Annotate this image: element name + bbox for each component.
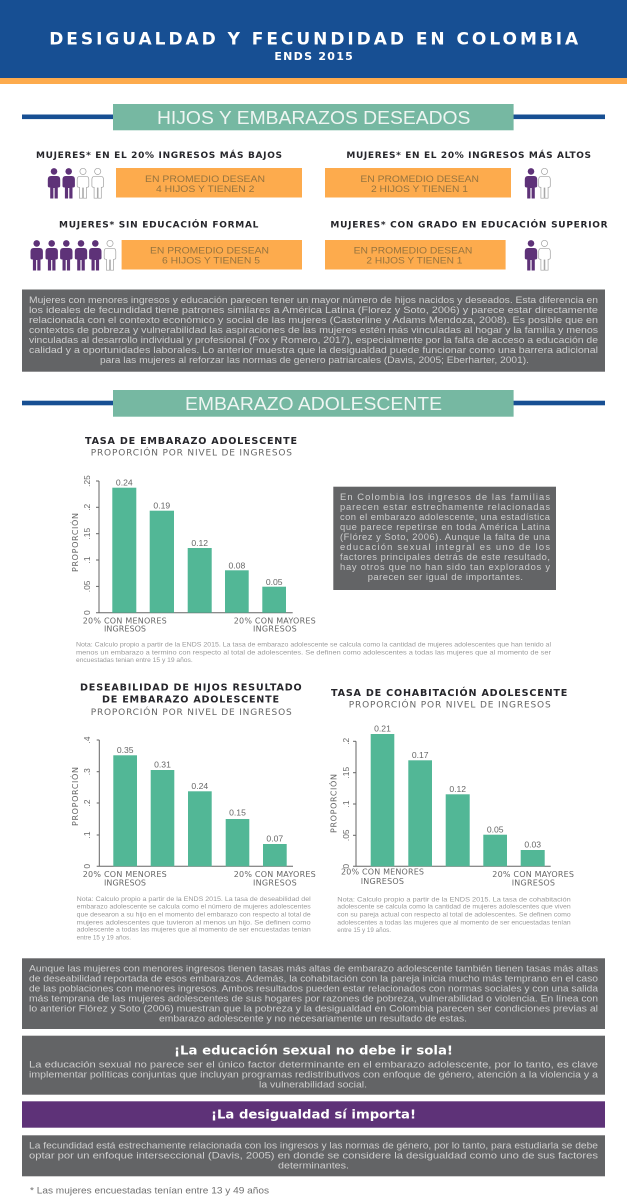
callout: 2 hijos y tienen 1 (325, 240, 506, 270)
text block: ingresos y educación: para las mujeres al reforzar las normas de genero patriarcales (Davis, 2005; Eberharter, 2001). (100, 354, 529, 365)
bar chart: tasa de embarazo adolescente: PROPORCIÓN (69, 513, 80, 572)
bar chart: tasa de cohabitación adolescente: .2 (341, 737, 351, 745)
text block: ingresos y educación: vinculadas al desarrollo individual y profesional (Fox y Romero, 2017), especialmente por la falta de acceso a educación de (29, 334, 598, 345)
icon: people 2 of 4 (48, 168, 103, 198)
text block: nota gráfico 1: encuestadas tenian entre 15 y 19 años. (76, 658, 193, 664)
bar chart: deseabilidad de hijos (69, 736, 316, 888)
heading: tasa de cohabitación adolescente: TASA DE COHABITACIÓN ADOLESCENTE (331, 686, 567, 699)
banner: la desigualdad sí importa (22, 1101, 605, 1128)
text block: ingresos de las familias: con el embarazo adolescente, una estadística (340, 511, 551, 522)
panel: ingresos más altos: MUJERES* EN EL 20% INGRESOS MÁS ALTOS (346, 149, 591, 161)
text block: nota gráfico 2 (77, 897, 312, 941)
bar chart: tasa de cohabitación adolescente: 0.12 (449, 784, 466, 794)
panel: ingresos más altos (325, 149, 591, 198)
text block: nota gráfico 1 (76, 642, 551, 664)
callout: 2 hijos y tienen 1: 2 HIJOS Y TIENEN 1 (366, 256, 462, 266)
text block: enfoque interseccional: determinantes. (278, 1159, 349, 1170)
text block: nota gráfico 3: adolescente se calcula como la cantidad de mujeres adolescentes que viven (337, 905, 571, 911)
text block: ingresos y educación: Mujeres con menores ingresos y educación parecen tener un mayor número de hijos nacidos y deseados. Esta diferencia en (29, 294, 598, 305)
text block: ingresos de las familias: parecen ser igual de importantes. (368, 571, 523, 582)
title: DESIGUALDAD Y FECUNDIDAD EN COLOMBIA (49, 30, 579, 50)
text block: ingresos y educación: los ideales de fecundidad tiene patrones similares a América Latina (Florez y Soto, 2006) y parece estar directamente (29, 304, 598, 315)
bar chart: tasa de embarazo adolescente: 0.05 (266, 577, 283, 587)
section heading: embarazo adolescente: EMBARAZO ADOLESCENTE (185, 394, 442, 414)
panel: sin educación formal (30, 218, 302, 270)
heading: ¡La educación sexual no debe ir sola! (174, 1042, 453, 1057)
bar chart: deseabilidad de hijos: INGRESOS (253, 879, 297, 888)
header banner (0, 0, 627, 84)
bar chart: deseabilidad de hijos: .4 (82, 736, 92, 744)
bar chart: tasa de cohabitación adolescente: 0.03 (524, 840, 541, 850)
bar chart: tasa de cohabitación adolescente: INGRESOS (361, 877, 404, 886)
bar chart: deseabilidad de hijos: .1 (82, 831, 92, 838)
text block: nota gráfico 3: adolescentes a todas las mujeres que al momento de ser encuestadas tenían (337, 921, 571, 927)
panel: la educación sexual no debe ir sola: La educación sexual no parece ser el único factor determinante en el embarazo adolescente, por lo tanto, es clave (29, 1058, 598, 1069)
footnote: * Las mujeres encuestadas tenían entre 13 y 49 años (30, 1185, 269, 1196)
callout: 2 hijos y tienen 1: 2 HIJOS Y TIENEN 1 (371, 184, 468, 195)
bar chart: tasa de cohabitación adolescente: 0.17 (412, 750, 429, 760)
text block: nota gráfico 2: embarazo adolescente se calcula como el número de mujeres adolescentes (77, 905, 311, 911)
bar chart: tasa de cohabitación adolescente: 0 (341, 864, 351, 869)
text block: enfoque interseccional: optar por un enfoque interseccional (Davis, 2005) en donde se considere la desigualdad como uno de sus factores (29, 1149, 598, 1160)
callout: 6 hijos y tienen 5 (122, 240, 302, 270)
heading: tasa de cohabitación adolescente: PROPORCIÓN POR NIVEL DE INGRESOS (349, 698, 551, 710)
text block: nota gráfico 1: Nota: Calculo propio a partir de la ENDS 2015. La tasa de embarazo adolescente se calcula como la cantidad de mujeres adolescentes que han tenido al (76, 642, 551, 648)
bar chart: tasa de embarazo adolescente: INGRESOS (104, 625, 146, 634)
bar chart: deseabilidad de hijos: .3 (82, 768, 92, 775)
text block: tasas más altas de deseabilidad (22, 958, 605, 1029)
text block: ingresos y educación: contextos de pobreza y vulnerabilidad las aspiraciones de las mujeres estén más vinculadas al hogar y la familia y menos (29, 324, 598, 335)
text block: nota gráfico 3: con su pareja actual con respecto al total de adolescentes. Se definen como (337, 913, 571, 919)
text block: ingresos y educación: relacionada con el contexto económico y social de las mujeres (Casterline y Adams Mendoza, 2008). Es posible que en (29, 314, 598, 325)
callout: 2 hijos y tienen 1: EN PROMEDIO DESEAN (354, 246, 472, 256)
bar chart: tasa de cohabitación adolescente: 20% CON MAYORES (492, 870, 574, 879)
bar chart: tasa de embarazo adolescente: .05 (82, 580, 92, 592)
text block: nota gráfico 2: mujeres adolescentes que tuvieron al menos un hijo. Se definen como (77, 920, 312, 926)
text block: tasas más altas de deseabilidad: de deseabilidad reportada de esos embarazos. Además, la cohabitación con la pareja inicia mucho más temprano en el caso (29, 972, 598, 983)
text block: nota gráfico 2: Nota: Calculo propio a partir de la ENDS 2015. La tasa de deseabilidad del (77, 897, 311, 903)
panel: ingresos más bajos (36, 149, 302, 198)
text block: tasas más altas de deseabilidad: más temprana de las mujeres adolescentes de sus hogares por razones de pobreza, vulnerabilidad o violencia. En línea con (29, 992, 598, 1003)
text block: nota gráfico 3: Nota: Calculo propio a partir de la ENDS 2015. La tasa de cohabitación (337, 897, 571, 903)
callout: 6 hijos y tienen 5: EN PROMEDIO DESEAN (150, 246, 269, 256)
bar chart: tasa de embarazo adolescente: 20% CON MAYORES (234, 617, 316, 626)
text block: enfoque interseccional: La fecundidad está estrechamente relacionada con los ingresos y las normas de género, por lo tanto, para estudiarla se debe (29, 1139, 598, 1150)
bar chart: deseabilidad de hijos: 20% CON MENORES (83, 870, 167, 879)
callout: 4 hijos y tienen 2 (116, 168, 302, 198)
panel: ingresos más bajos: MUJERES* EN EL 20% INGRESOS MÁS BAJOS (36, 149, 282, 161)
heading: deseabilidad de hijos: DE EMBARAZO ADOLESCENTE (102, 694, 279, 705)
icon: people 5 of 6 (30, 240, 116, 270)
bar chart: tasa de embarazo adolescente (69, 475, 316, 634)
bar chart: deseabilidad de hijos: 0.35 (117, 745, 134, 755)
bar chart: deseabilidad de hijos: 0 (82, 864, 92, 869)
section heading: embarazo adolescente (22, 390, 605, 417)
text block: ingresos de las familias: En Colombia los ingresos de las familias (340, 491, 550, 502)
text block: ingresos de las familias: factores principales detrás de este resultado, (340, 551, 550, 562)
banner: la desigualdad sí importa: ¡La desigualdad sí importa! (211, 1106, 416, 1121)
heading: tasa de embarazo adolescente (85, 436, 297, 459)
bar chart: tasa de embarazo adolescente: 0.08 (229, 561, 245, 571)
text block: tasas más altas de deseabilidad: lo anterior Flórez y Soto (2006) muestran que la pobreza y la desigualdad en Colombia parecen ser condiciones previas al (29, 1002, 598, 1013)
bar chart: tasa de embarazo adolescente: .1 (82, 556, 92, 564)
bar chart: deseabilidad de hijos: 20% CON MAYORES (234, 870, 316, 879)
panel: la educación sexual no debe ir sola (22, 1036, 605, 1095)
bar chart: deseabilidad de hijos: 0.07 (266, 833, 283, 843)
bar chart: tasa de cohabitación adolescente: 0.05 (487, 824, 504, 834)
heading: tasa de cohabitación adolescente (331, 686, 567, 710)
panel: la educación sexual no debe ir sola: la vulnerabilidad social. (259, 1078, 367, 1089)
text block: tasas más altas de deseabilidad: embarazo adolescente y no necesariamente un resultado de estas. (159, 1012, 467, 1023)
bar chart: deseabilidad de hijos: 0.31 (154, 760, 171, 770)
heading: deseabilidad de hijos (80, 683, 302, 718)
bar chart: tasa de embarazo adolescente: INGRESOS (253, 625, 297, 634)
section heading: hijos y embarazos deseados: HIJOS Y EMBARAZOS DESEADOS (157, 108, 470, 128)
bar chart: tasa de cohabitación adolescente: PROPORCIÓN (328, 774, 339, 833)
text block: ingresos de las familias: que parece repetirse en toda América Latina (340, 521, 551, 532)
bar chart: tasa de embarazo adolescente: 20% CON MENORES (83, 617, 167, 626)
bar chart: tasa de embarazo adolescente: .15 (82, 528, 92, 540)
text block: ingresos de las familias: (Flórez y Soto, 2006). Aunque la falta de una (340, 531, 551, 542)
bar chart: tasa de cohabitación adolescente: 20% CON MENORES (341, 868, 424, 877)
text block: ingresos de las familias: educación sexual integral es uno de los (340, 541, 550, 552)
text block: ingresos y educación: calidad y a oportunidades laborales. Lo anterior muestra que la desigualdad puede funcionar como una barrera adicional (29, 344, 598, 355)
text block: nota gráfico 1: menos un embarazo a termino con respecto al total de adolescentes. Se definen como adolescentes a todas las mujeres que al momento de ser (76, 650, 551, 656)
bar chart: tasa de cohabitación adolescente: .15 (341, 767, 351, 779)
callout: 2 hijos y tienen 1: EN PROMEDIO DESEAN (360, 174, 479, 185)
heading: deseabilidad de hijos: DESEABILIDAD DE HIJOS RESULTADO (80, 683, 302, 694)
panel: sin educación formal: MUJERES* SIN EDUCACIÓN FORMAL (59, 218, 259, 230)
bar chart: tasa de cohabitación adolescente: .05 (341, 829, 351, 841)
bar chart: deseabilidad de hijos: 0.15 (229, 808, 246, 818)
bar chart: deseabilidad de hijos: 0.24 (191, 781, 208, 791)
callout: 6 hijos y tienen 5: 6 HIJOS Y TIENEN 5 (162, 256, 260, 266)
heading: deseabilidad de hijos: PROPORCIÓN POR NIVEL DE INGRESOS (91, 706, 292, 718)
bar chart: deseabilidad de hijos: PROPORCIÓN (69, 767, 80, 826)
icon: people 1 of 2 (525, 168, 550, 198)
panel: educación superior: MUJERES* CON GRADO EN EDUCACIÓN SUPERIOR (330, 218, 608, 230)
text block: nota gráfico 2: que desearon a su hijo en el momento del embarazo con respecto al total de (77, 913, 311, 919)
bar chart: tasa de cohabitación adolescente: .1 (341, 800, 351, 808)
callout: 4 hijos y tienen 2: 4 HIJOS Y TIENEN 2 (156, 184, 254, 195)
icon: people 1 of 2 (525, 240, 550, 270)
text block: tasas más altas de deseabilidad: Aunque las mujeres con menores ingresos tienen tasas más altas de embarazo adolescente también tienen tasas más altas (29, 962, 598, 973)
section heading: hijos y embarazos deseados (22, 104, 605, 130)
bar chart: tasa de cohabitación adolescente: 0.21 (374, 723, 391, 733)
text block: enfoque interseccional (22, 1135, 605, 1176)
text block: nota gráfico 2: entre 15 y 19 años. (77, 935, 131, 941)
heading: tasa de embarazo adolescente: TASA DE EMBARAZO ADOLESCENTE (85, 436, 297, 447)
bar chart: tasa de embarazo adolescente: 0.24 (116, 478, 133, 488)
text block: ingresos de las familias (333, 487, 556, 590)
bar chart: tasa de embarazo adolescente: 0.19 (153, 501, 170, 511)
subtitle: ENDS 2015 (274, 50, 353, 63)
bar chart: deseabilidad de hijos: INGRESOS (104, 879, 146, 888)
text block: tasas más altas de deseabilidad: de las poblaciones con menores ingresos. Ambos resultados pueden estar relacionados con normas sociales y con una salida (29, 982, 599, 993)
callout: 2 hijos y tienen 1 (325, 168, 511, 198)
callout: 4 hijos y tienen 2: EN PROMEDIO DESEAN (145, 174, 265, 185)
bar chart: tasa de cohabitación adolescente: INGRESOS (512, 879, 555, 888)
text block: nota gráfico 2: adolescente a todas las mujeres que al momento de ser encuestadas tenian (77, 928, 311, 934)
bar chart: tasa de embarazo adolescente: .25 (82, 475, 92, 487)
bar chart: deseabilidad de hijos: .2 (82, 799, 92, 806)
heading: tasa de embarazo adolescente: PROPORCIÓN POR NIVEL DE INGRESOS (91, 447, 292, 459)
bar chart: tasa de cohabitación adolescente (328, 723, 574, 888)
text block: ingresos y educación (22, 290, 605, 372)
panel: la educación sexual no debe ir sola: implementar políticas conjuntas que incluyan programas redistributivos con enfoque de género, atención a la violencia y a (29, 1068, 599, 1079)
bar chart: tasa de embarazo adolescente: 0.12 (191, 538, 208, 548)
bar chart: tasa de embarazo adolescente: 0 (82, 610, 92, 615)
text block: ingresos de las familias: hay otros que no han sido tan explorados y (340, 561, 550, 572)
text block: ingresos de las familias: parecen estar estrechamente relacionadas (340, 501, 550, 512)
text block: nota gráfico 3 (337, 897, 571, 934)
panel: educación superior (325, 218, 608, 270)
bar chart: tasa de embarazo adolescente: .2 (82, 503, 92, 511)
text block: nota gráfico 3: entre 15 y 19 años. (337, 928, 391, 934)
